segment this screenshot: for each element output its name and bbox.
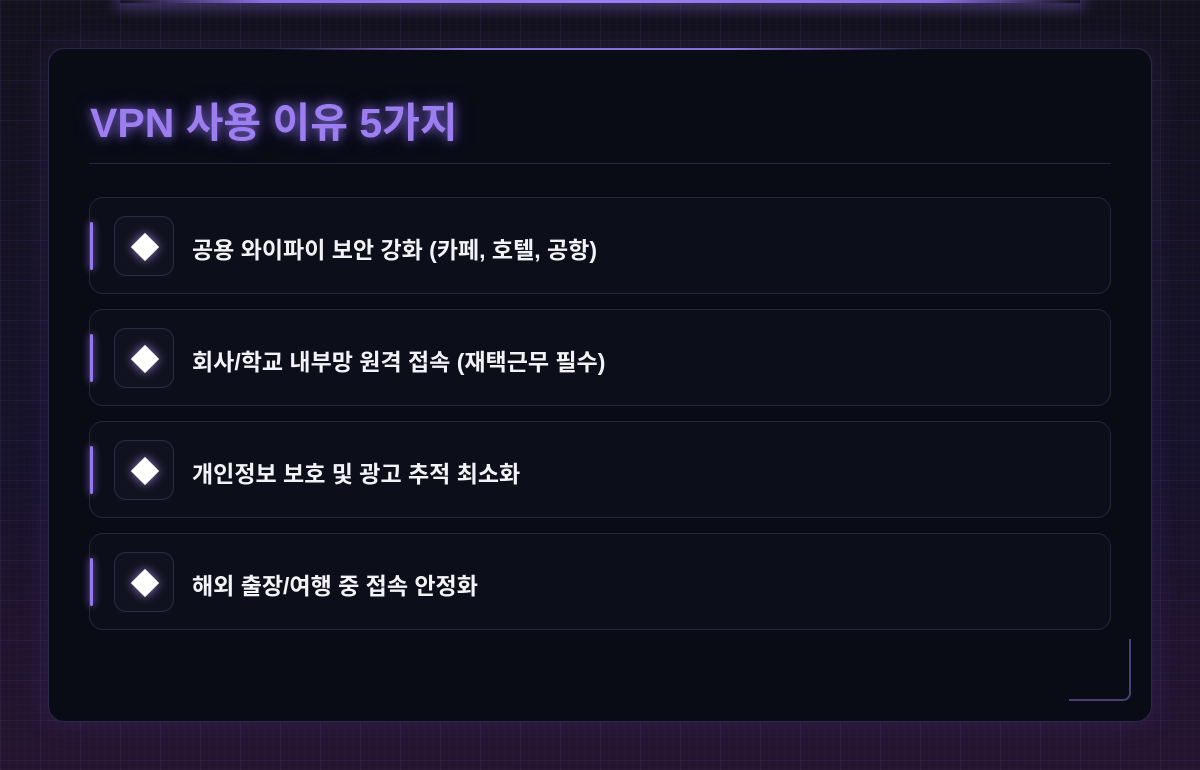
icon: diamond xyxy=(114,216,174,276)
icon: diamond xyxy=(114,552,174,612)
text: 개인정보 보호 및 광고 추적 최소화 xyxy=(192,461,520,487)
title: VPN 사용 이유 5가지 xyxy=(90,100,458,146)
text: 공용 와이파이 보안 강화 (카페, 호텔, 공항) xyxy=(192,237,597,263)
corner bracket xyxy=(1069,639,1131,701)
item 1 xyxy=(89,197,1111,294)
top glow line xyxy=(120,0,1080,3)
item 4 xyxy=(89,533,1111,630)
item 3 xyxy=(89,421,1111,518)
text: 회사/학교 내부망 원격 접속 (재택근무 필수) xyxy=(192,349,605,375)
icon: diamond xyxy=(114,328,174,388)
item 2 xyxy=(89,309,1111,406)
text: 해외 출장/여행 중 접속 안정화 xyxy=(192,573,478,599)
icon: diamond xyxy=(114,440,174,500)
